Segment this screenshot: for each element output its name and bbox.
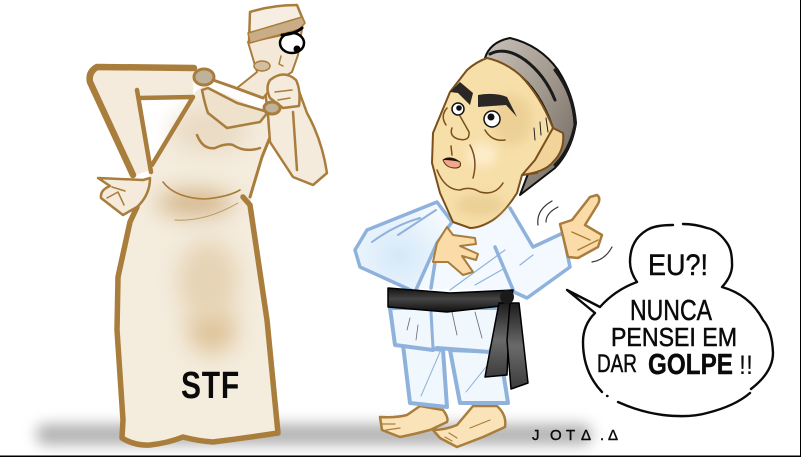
head and face — [432, 58, 553, 228]
neck and face — [237, 22, 303, 98]
belt — [388, 288, 513, 312]
left arm fill — [90, 67, 194, 176]
signature: JOTΔ.Δ — [532, 427, 618, 444]
balloon text: EU?!: EU?! — [648, 249, 708, 282]
right arm — [265, 83, 327, 185]
jacket skirt — [390, 308, 505, 352]
hand at chin — [268, 74, 300, 108]
left hand on chest — [433, 227, 478, 275]
robe waist and folds — [250, 120, 277, 197]
jacket torso — [392, 208, 570, 298]
shoulder clasps — [194, 69, 280, 114]
cap — [249, 5, 304, 42]
ear — [522, 128, 563, 175]
robe shading — [157, 108, 248, 354]
balloon text: GOLPE: GOLPE — [648, 349, 733, 381]
balloon text: DAR: DAR — [597, 350, 637, 378]
eyebrows — [450, 82, 473, 105]
hair — [485, 38, 576, 195]
feet — [380, 406, 505, 447]
mouth — [443, 158, 460, 168]
speech balloon — [567, 224, 773, 416]
left arm outline — [90, 67, 194, 175]
ground shadow — [36, 424, 592, 445]
robe outline — [117, 197, 278, 445]
balloon text: exclamation marks: !! — [739, 350, 753, 380]
nose and wrinkles — [437, 108, 505, 193]
motion lines — [538, 201, 612, 262]
cowl — [202, 88, 268, 128]
right pointing hand — [560, 195, 602, 258]
balloon text: NUNCA: NUNCA — [630, 295, 713, 327]
trousers — [403, 345, 508, 407]
figure: man in judo gi — [355, 38, 612, 447]
left sleeve — [355, 202, 452, 292]
belt hanging ends — [485, 303, 510, 377]
balloon outline — [567, 224, 773, 416]
robe body — [117, 85, 278, 445]
face shading — [456, 95, 532, 216]
hand on hip — [98, 178, 150, 215]
label: STF: STF — [181, 365, 240, 407]
figure: STF robed statue — [90, 5, 327, 445]
balloon text: PENSEI EM: PENSEI EM — [611, 322, 737, 352]
cheek — [254, 61, 270, 71]
eyes — [452, 103, 464, 115]
eye — [280, 33, 304, 53]
